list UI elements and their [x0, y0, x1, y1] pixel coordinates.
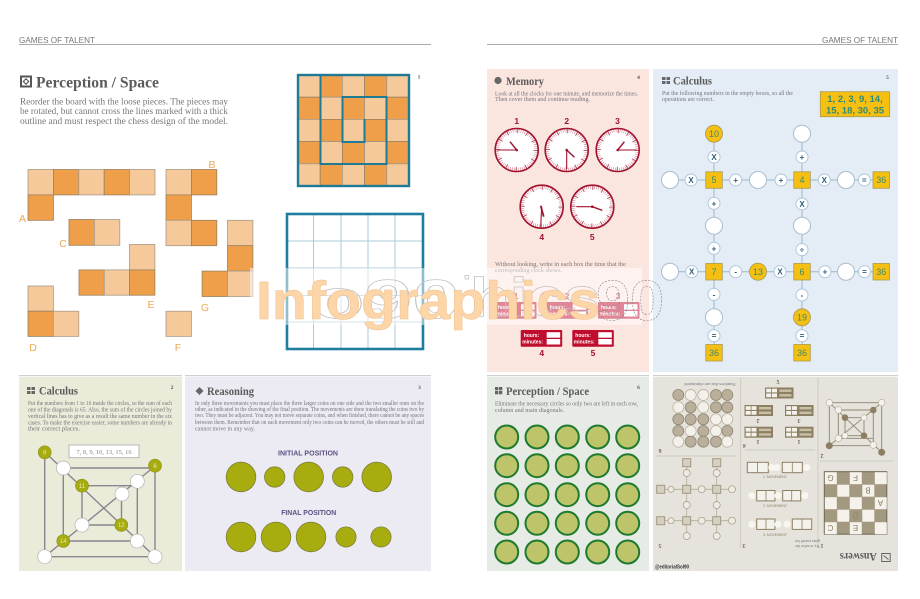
diagram: operations grid: - — [801, 291, 804, 300]
answer 3: coin moves: 1. MOVEMENT — [763, 475, 788, 479]
answer 6: circle grid: Numbers that are eliminated — [684, 382, 736, 387]
text: upside-down small note: games yourself first — [794, 539, 820, 544]
header: left page: GAMES OF TALENT — [19, 35, 95, 45]
diagram: operations grid: 7 — [711, 267, 717, 277]
answer 3: coin moves: 3 — [742, 542, 746, 548]
number list box — [69, 445, 139, 458]
heading: initial position: INITIAL POSITION — [278, 448, 338, 458]
text: calculus puzzle instructions: Put the following numbers in the empty boxes, so all the — [662, 90, 793, 97]
watermark: ghost outline — [312, 266, 600, 330]
text: perception instructions — [495, 400, 638, 414]
text: calculus instructions: their correct places. — [28, 426, 81, 432]
answer 4: clock times: 3 — [798, 417, 800, 423]
watermark: ghost outline: hics — [470, 266, 600, 328]
time box 2: 2 — [565, 291, 570, 301]
diagram: operations grid: 36 — [876, 175, 886, 185]
diagram: operations grid: = — [712, 332, 717, 341]
heading: Reasoning: Reasoning — [207, 386, 254, 398]
answer 3: coin moves — [742, 462, 812, 548]
diagram: operations grid: 5 — [711, 175, 717, 185]
diagram: operations grid: X — [689, 268, 695, 277]
number 3: 3 — [418, 385, 421, 391]
text: calculus puzzle instructions: operations are correct. — [662, 97, 714, 103]
diagram: operations grid: = — [800, 332, 805, 341]
text: instructions: outline and must respect the chess design of the model. — [20, 116, 228, 127]
number 2: 2 — [171, 385, 174, 391]
text: reasoning instructions: two. They must be adjacent. You may not move separate coins, and when finished, there cannot be any spaces — [195, 412, 425, 419]
watermark: small square mark — [465, 276, 468, 279]
text: upside-down small note: Try to solve the — [795, 544, 820, 549]
clock 3 — [596, 116, 639, 172]
text: reasoning instructions: between them. Remember that on each movement only two coins can be moved, the others must be still and — [195, 420, 424, 426]
coins: final — [226, 522, 391, 552]
time box 3 — [598, 291, 640, 319]
answer 1: chessboard: C — [827, 523, 833, 532]
credit: @editorialSol90 — [655, 564, 689, 570]
piece F: F — [175, 342, 181, 354]
time box 1: 1 — [514, 291, 519, 301]
piece G — [201, 220, 253, 314]
diagram: operations grid: X — [711, 153, 717, 162]
diagram: magic nested squares: 6 — [153, 464, 157, 470]
diagram: magic nested squares: 14 — [60, 539, 67, 545]
diagram: operations grid: + — [712, 244, 717, 253]
text: calculus puzzle instructions — [662, 90, 793, 103]
panel: perception circles — [487, 375, 649, 571]
time box 4: 4 — [539, 348, 544, 358]
text: upside-down small note — [794, 539, 820, 549]
icon: perception heading — [20, 76, 32, 88]
heading: Perception / Space: Perception / Space — [506, 386, 589, 398]
diagram: operations grid: 36 — [709, 348, 719, 358]
answer 3: coin moves: 2. MOVEMENT — [763, 504, 788, 508]
number list box: 1, 2, 3, 9, 14, — [827, 94, 883, 105]
text: calculus instructions — [28, 400, 172, 432]
answer 5: operations grid: 5 — [658, 542, 662, 548]
panel: calculus (right) — [653, 69, 898, 372]
answer 1: chessboard: 1 — [820, 542, 824, 548]
piece E — [79, 244, 155, 311]
header: right page: GAMES OF TALENT — [822, 35, 898, 45]
diagram: operations grid: + — [712, 199, 717, 208]
time box 5 — [572, 330, 614, 358]
text: calculus instructions: one of the diagonals is 65. Also, the sum of the circles joined by — [28, 406, 172, 413]
answer 2: nested squares — [820, 399, 885, 458]
heading: Calculus: Calculus — [673, 76, 712, 88]
text: calculus instructions: Put the numbers from 1 to 16 inside the circles, so the sum of each — [28, 400, 172, 407]
piece D — [28, 286, 79, 354]
answer 3: coin moves: 3. MOVEMENT — [763, 533, 788, 537]
diagram: operations grid: + — [800, 153, 805, 162]
diagram: operations grid: + — [733, 176, 738, 185]
diagram: operations grid: X — [822, 176, 828, 185]
text: reasoning instructions: In only three movements you must place the three larger coins on one side and the two smaller ones on the — [195, 401, 424, 407]
time box 5: 5 — [591, 348, 596, 358]
answer 2: nested squares: 2 — [820, 452, 824, 458]
heading: Memory: Memory — [506, 76, 544, 88]
diagram: operations grid: 36 — [876, 267, 886, 277]
answer 1: chessboard: E — [853, 523, 858, 532]
heading: Calculus: Calculus — [39, 386, 78, 398]
answer 1: chessboard: F — [853, 473, 858, 482]
piece C: C — [59, 238, 67, 250]
watermark: Infographics: Infographics — [256, 271, 600, 331]
diagram: operations grid: 6 — [799, 267, 805, 277]
piece E: E — [147, 299, 155, 311]
coins: initial — [226, 462, 392, 492]
piece B — [166, 159, 217, 246]
piece A — [19, 170, 155, 225]
text: instructions — [20, 98, 228, 127]
text: memory follow-up: Without looking, write in each box the time that the — [495, 262, 626, 268]
answer 1: chessboard — [820, 472, 887, 548]
diagram: magic nested squares: 9 — [43, 450, 47, 456]
watermark: 90 dashed outline: 90 — [596, 269, 664, 333]
diagram: operations grid: X — [688, 176, 694, 185]
watermark: ghost outline: o90 — [312, 268, 460, 330]
time box 4 — [521, 330, 562, 358]
text: reasoning instructions: other, as indicated in the drawing of the final position. The movements are done translating the coins two by — [195, 406, 424, 413]
diagram: operations grid: X — [777, 268, 783, 277]
time box 2 — [547, 291, 588, 319]
diagram: operations grid: 4 — [799, 175, 805, 185]
diagram: magic nested squares: 11 — [79, 484, 86, 490]
number 5: 5 — [886, 75, 889, 81]
icon: grid — [495, 387, 502, 394]
number list box: 7, 8, 9, 10, 13, 15, 16 — [76, 449, 132, 456]
text: memory instructions: Look at all the clocks for one minute, and memorize the times. — [495, 90, 638, 98]
diagram: operations grid: - — [713, 290, 716, 299]
answer 1: chessboard: G — [827, 473, 834, 482]
icon: reasoning — [196, 387, 204, 395]
answer 5: operations grid — [657, 459, 736, 548]
text: memory follow-up — [495, 262, 626, 274]
answer 1: chessboard: B — [865, 486, 871, 494]
circle grid — [495, 426, 639, 564]
number 4: 4 — [637, 75, 640, 81]
diagram: operations grid: - — [734, 268, 737, 277]
model chessboard — [298, 75, 409, 186]
clock 4 — [520, 185, 563, 242]
answer 4: clock times: 1 — [798, 438, 800, 444]
text: calculus instructions: vertical lines has to give as a result the same number in the six — [28, 414, 172, 420]
diagram: operations grid: = — [862, 268, 867, 277]
icon: calculus — [27, 387, 35, 394]
piece F — [166, 311, 191, 354]
empty grid — [287, 214, 423, 349]
number 1: 1 — [418, 74, 421, 80]
answer 1: chessboard: A — [877, 498, 883, 507]
answer 4: clock times: 5 — [776, 380, 780, 386]
diagram: operations grid: 13 — [753, 267, 763, 277]
icon: memory — [494, 77, 502, 84]
diagram: magic nested squares: 12 — [118, 523, 125, 529]
diagram: operations grid: 10 — [709, 129, 719, 139]
answer 4: clock times: 1 — [756, 438, 760, 444]
clock 2: 2 — [564, 116, 569, 126]
clock 5: 5 — [590, 232, 595, 242]
answer 6: circle grid — [658, 382, 736, 453]
answer 4: clock times: 2 — [756, 417, 760, 423]
piece C — [59, 220, 120, 250]
panel: reasoning — [185, 375, 431, 571]
clock 1: 1 — [514, 116, 519, 126]
text: memory instructions — [495, 90, 638, 103]
heading: Answers (upside down): Answers — [840, 550, 877, 564]
icon: answers — [882, 554, 890, 562]
diagram: operations grid: X — [799, 200, 805, 209]
text: perception instructions: Eliminate the necessary circles so only two are left in each row, — [495, 400, 638, 408]
time box 3: 3 — [616, 291, 621, 301]
text: instructions: Reorder the board with the loose pieces. The pieces may — [20, 98, 228, 108]
clock 1 — [495, 116, 538, 172]
answer 1: chessboard: D — [852, 510, 858, 520]
piece B: B — [208, 159, 216, 171]
piece A: A — [19, 213, 26, 225]
diagram: operations grid: + — [779, 176, 784, 185]
text: instructions: be rotated, but cannot cross the lines marked with a thick — [20, 107, 228, 117]
icon: calculus — [662, 77, 670, 84]
heading: Perception / Space: Perception / Space — [36, 74, 159, 92]
panel: answers — [653, 375, 898, 571]
diagram: operations grid: + — [823, 268, 828, 277]
diagram: magic nested squares — [38, 446, 162, 564]
watermark: whitening band — [250, 268, 642, 325]
diagram: operations grid: ÷ — [800, 246, 805, 255]
number list box — [820, 92, 890, 117]
text: reasoning instructions — [195, 401, 425, 432]
answer 6: circle grid: 6 — [658, 447, 662, 453]
piece D: D — [29, 342, 37, 354]
clock 4: 4 — [539, 232, 544, 242]
panel: calculus (left) — [19, 375, 182, 571]
clock 5 — [571, 185, 614, 242]
text: calculus instructions: cases. To make the exercise easier, some numbers are already in — [28, 420, 172, 426]
diagram: operations grid: = — [862, 176, 867, 185]
number list box: 15, 18, 30, 35 — [826, 106, 885, 116]
clock 2 — [545, 116, 588, 172]
answer 4: clock times: 4 — [743, 442, 746, 448]
heading: final position: FINAL POSITION — [281, 508, 336, 517]
text: perception instructions: column and main diagonals. — [495, 408, 565, 414]
clock 3: 3 — [615, 116, 620, 126]
answer 4: clock times — [743, 380, 814, 448]
panel: memory — [487, 69, 649, 372]
text: reasoning instructions: cannot move in any way. — [195, 426, 255, 432]
text: memory follow-up: corresponding clock shows. — [495, 268, 562, 274]
time box 1 — [495, 291, 536, 319]
text: memory instructions: Then cover them and continue reading. — [495, 97, 591, 103]
diagram: operations grid — [662, 125, 890, 361]
diagram: operations grid: 19 — [797, 312, 807, 322]
diagram: operations grid: 36 — [797, 348, 807, 358]
number 6: 6 — [637, 385, 640, 391]
piece G: G — [201, 302, 209, 314]
